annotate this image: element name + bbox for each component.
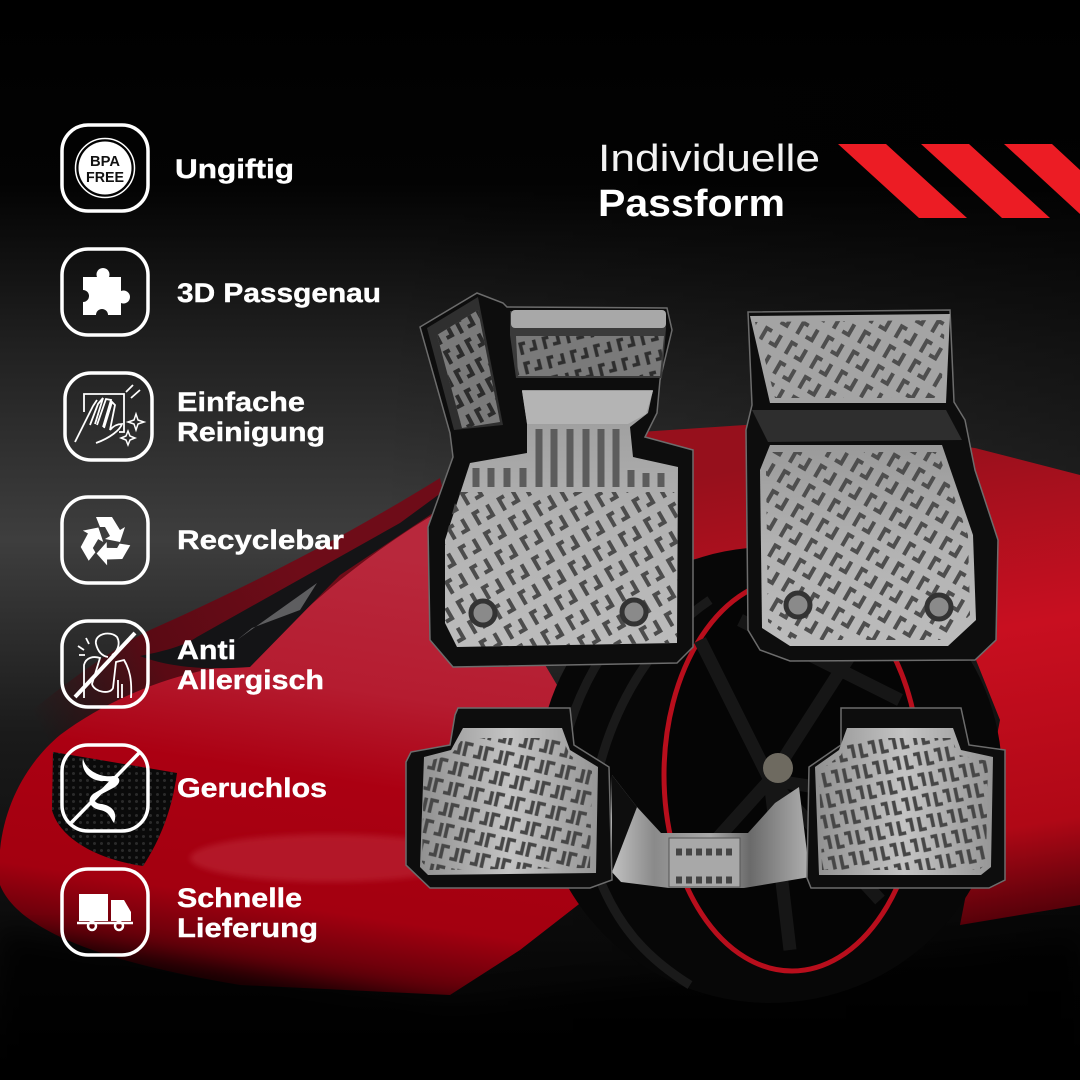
icon: BPA free: FREE <box>86 169 124 186</box>
feature: Schnelle Lieferung <box>62 869 318 955</box>
icon: allergic person crossed out <box>62 621 148 707</box>
icon: odour swirl crossed out <box>62 745 148 831</box>
windscreen trim <box>140 490 445 668</box>
heading <box>598 138 820 225</box>
tyre <box>538 547 1002 1003</box>
label <box>177 387 325 447</box>
label <box>177 883 318 943</box>
label: 3D Passgenau <box>177 278 381 308</box>
car roof and rear panel <box>640 424 1080 925</box>
label: Ungiftig <box>175 154 294 184</box>
rear right mat <box>807 708 1005 888</box>
top panel <box>510 311 666 378</box>
icon: BPA free <box>62 125 148 211</box>
front grille <box>52 752 177 866</box>
mat body <box>420 293 693 667</box>
feature: 3D Passgenau <box>62 249 381 335</box>
label: Allergisch <box>177 665 324 695</box>
upper panel <box>750 314 950 403</box>
vertical ribs <box>476 429 661 487</box>
label: Lieferung <box>177 913 318 943</box>
mat body <box>746 310 998 661</box>
label: Reinigung <box>177 417 325 447</box>
bridge dark fold <box>612 775 637 872</box>
feature: Anti Allergisch <box>62 621 324 707</box>
mat tread surface <box>760 445 976 646</box>
diamond tread <box>445 492 678 647</box>
pedal wedge <box>427 297 503 430</box>
spokes <box>680 620 900 950</box>
mat tread surface <box>445 390 678 647</box>
hood upper edge <box>30 478 450 760</box>
red diagonal stripes <box>838 144 1080 218</box>
front right floor mat <box>746 310 998 661</box>
center bridge <box>610 775 810 888</box>
heel ramp <box>522 391 653 424</box>
icon: recycling arrows <box>62 497 148 583</box>
rim <box>664 579 920 971</box>
car hood and front body <box>0 505 610 995</box>
red sports car <box>0 424 1080 1080</box>
center plate <box>669 838 740 887</box>
feature: Ungiftig <box>62 125 294 211</box>
fastening clips <box>786 593 810 617</box>
rear left mat <box>406 708 612 888</box>
feature: Geruchlos <box>62 745 327 831</box>
bottom shadow <box>0 930 1080 1080</box>
rear floor mats <box>406 708 1005 888</box>
fastening clips <box>471 601 495 625</box>
icon: cleaning hand <box>65 373 152 460</box>
label: Einfache <box>177 387 305 417</box>
label <box>177 635 324 695</box>
hub <box>763 753 793 783</box>
bumper highlight <box>190 834 470 882</box>
label: Anti <box>177 635 236 665</box>
wheel with tyre and red rim <box>538 547 1002 1003</box>
icon: puzzle piece <box>62 249 148 335</box>
label: Schnelle <box>177 883 302 913</box>
front left floor mat <box>420 293 693 667</box>
feature: Recyclebar <box>62 497 345 583</box>
feature: Einfache Reinigung <box>65 373 325 460</box>
label: Recyclebar <box>177 525 345 555</box>
heading: Individuelle <box>598 138 820 180</box>
heading: Passform <box>598 183 785 225</box>
icon: delivery truck <box>62 869 148 955</box>
step <box>752 410 962 442</box>
label: Geruchlos <box>177 773 327 803</box>
icon: BPA free: BPA <box>90 153 120 170</box>
